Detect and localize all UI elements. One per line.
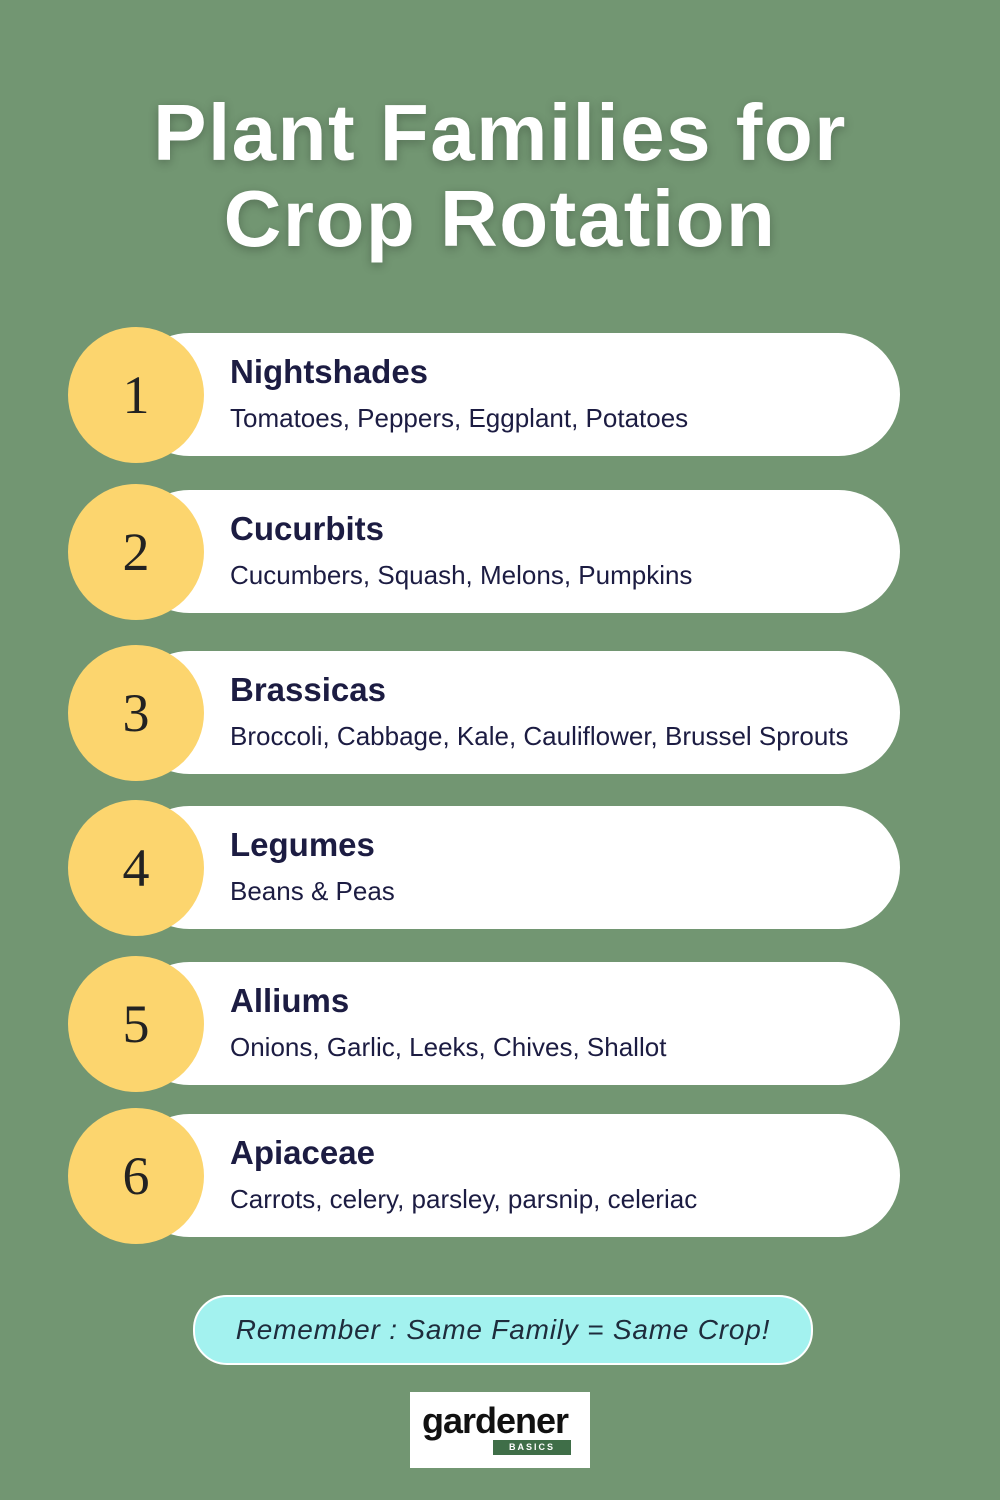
row 4: Legumes: Beans & Peas [230, 876, 395, 906]
row 2: Cucurbits: 2 [122, 522, 150, 582]
row 3: Brassicas: 3 [122, 683, 150, 743]
row 1: Nightshades: Tomatoes, Peppers, Eggplant, Potatoes [230, 403, 688, 433]
row 3: Brassicas: Brassicas [230, 671, 386, 708]
row 4: Legumes: Legumes [230, 826, 375, 863]
row 4: Legumes [68, 800, 900, 936]
logo: BASICS [509, 1442, 555, 1452]
row 1: Nightshades: Nightshades [230, 353, 428, 390]
logo [410, 1392, 590, 1468]
title: Crop Rotation [224, 174, 776, 263]
row 3: Brassicas [68, 645, 900, 781]
row 3: Brassicas: Broccoli, Cabbage, Kale, Cauliflower, Brussel Sprouts [230, 721, 849, 751]
title: Plant Families for [153, 88, 847, 177]
row 5: Alliums: Alliums [230, 982, 349, 1019]
row 5: Alliums: 5 [122, 994, 150, 1054]
row 6: Apiaceae: 6 [122, 1146, 150, 1206]
row 2: Cucurbits: Cucurbits [230, 510, 384, 547]
row 6: Apiaceae [68, 1108, 900, 1244]
callout: Remember : Same Family = Same Crop! [236, 1314, 770, 1345]
row 6: Apiaceae: Carrots, celery, parsley, parsnip, celeriac [230, 1184, 697, 1214]
row 5: Alliums [68, 956, 900, 1092]
row 2: Cucurbits [68, 484, 900, 620]
row 5: Alliums: Onions, Garlic, Leeks, Chives, Shallot [230, 1032, 666, 1062]
callout [193, 1295, 813, 1365]
row 1: Nightshades: 1 [122, 365, 150, 425]
row 2: Cucurbits: Cucumbers, Squash, Melons, Pumpkins [230, 560, 692, 590]
logo: gardener [422, 1400, 568, 1441]
row 1: Nightshades [68, 327, 900, 463]
row 6: Apiaceae: Apiaceae [230, 1134, 375, 1171]
title [153, 88, 847, 268]
row 4: Legumes: 4 [122, 838, 150, 898]
